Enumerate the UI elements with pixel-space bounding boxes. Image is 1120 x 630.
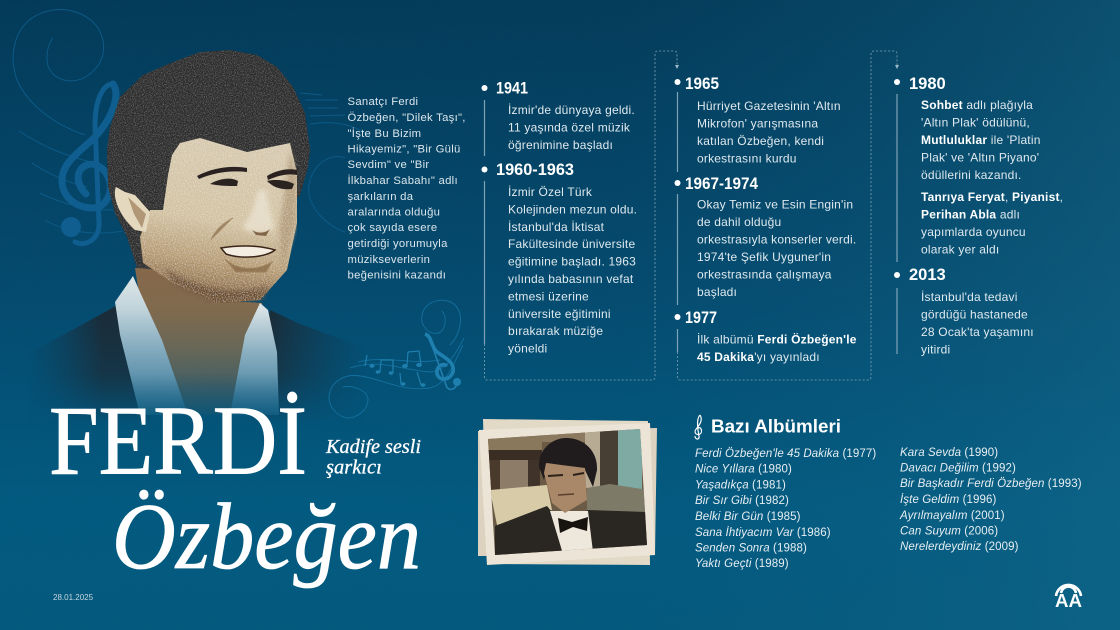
biography text: Özbeğen, "Dilek Taşı", — [348, 112, 466, 124]
entry: 1977: İlk albümü Ferdi Özbeğen'le — [697, 332, 857, 346]
date: 28.01.2025 — [53, 593, 94, 602]
entry: 1941: İzmir'de dünyaya geldi. — [508, 103, 635, 117]
entry: 1965: 1965 — [685, 75, 719, 93]
entry: 1967-1974 — [674, 175, 856, 305]
entry: 1965: katılan Özbeğen, kendi — [697, 134, 824, 148]
albums heading with clef icon: Bazı Albümleri — [711, 416, 841, 436]
smile lines and chin shadow — [211, 218, 272, 272]
entry: 1980: 'Altın Plak' ödülünü, — [921, 116, 1030, 130]
entry: 1980: Mutluluklar ile 'Platin — [921, 133, 1041, 147]
entry: 1967-1974: başladı — [697, 285, 737, 299]
nose highlight — [243, 190, 274, 233]
biography text: müzikseverlerin — [348, 254, 430, 266]
eyebrows — [197, 167, 297, 180]
timeline column 1 — [482, 80, 637, 356]
entry: 1977 — [674, 309, 857, 364]
entry: 1960-1963: bırakarak müziğe — [508, 324, 603, 338]
album list, column 1: Belki Bir Gün (1985) — [695, 511, 801, 523]
entry: 1980: Sohbet adlı plağıyla — [921, 98, 1033, 112]
title: Özbeğen: Özbeğen — [112, 485, 421, 589]
album list, column 1: Ferdi Özbeğen'le 45 Dakika (1977) — [695, 448, 876, 460]
entry: 1960-1963: yılında babasının vefat — [508, 272, 634, 286]
timeline column 3 — [894, 75, 1063, 356]
ear — [115, 187, 150, 232]
biography text — [348, 96, 466, 282]
photo content — [488, 429, 647, 555]
shirt collar — [115, 276, 188, 415]
biography text: şarkıların da — [348, 191, 414, 203]
entry: 1960-1963: Fakültesinde üniversite — [508, 237, 635, 251]
entry: 1960-1963: etmesi üzerine — [508, 289, 589, 303]
entry: 1941 — [482, 80, 635, 156]
album list, column 1: Yaşadıkça (1981) — [695, 480, 786, 492]
neck and chest — [135, 268, 268, 415]
face — [140, 138, 297, 303]
album list, column 1: Senden Sonra (1988) — [695, 542, 807, 554]
entry: 2013: İstanbul'da tedavi — [921, 290, 1018, 304]
title: FERDİ: FERDİ — [49, 386, 307, 496]
album list, column 2: Nerelerdeydiniz (2009) — [900, 541, 1019, 553]
jacket — [44, 306, 345, 417]
entry: 1960-1963: 1960-1963 — [496, 161, 574, 179]
timeline connectors (dashed) with arrows — [484, 51, 899, 380]
icon: small treble clef — [695, 415, 701, 439]
entry: 1967-1974: orkestrasıyla konserler verdi. — [697, 232, 856, 246]
album list, column 2: Ayrılmayalım (2001) — [899, 510, 1005, 522]
album list, column 2: Kara Sevda (1990) — [900, 447, 998, 459]
biography text: Sevdim" ve "Bir — [348, 159, 429, 171]
entry: 1977: 1977 — [685, 309, 717, 327]
album list, column 1: Bir Sır Gibi (1982) — [695, 495, 789, 507]
entry: 1967-1974: 1967-1974 — [685, 175, 759, 193]
paper stack — [483, 419, 650, 565]
entry: 1980: Plak' ve 'Altın Piyano' — [921, 150, 1039, 164]
album list, column 2: İşte Geldim (1996) — [900, 494, 996, 506]
entry: 1965: Hürriyet Gazetesinin 'Altın — [697, 99, 841, 113]
biography text: Hikayemiz", "Bir Gülü — [348, 144, 461, 156]
biography text: İlkbahar Sabahı" adlı — [348, 174, 458, 187]
album list, column 1: Yaktı Geçti (1989) — [695, 558, 789, 570]
logo: Anadolu Agency: AA — [1055, 591, 1082, 611]
entry: 1967-1974: orkestrasında çalışmaya — [697, 268, 832, 282]
entry: 1960-1963: İstanbul'da İktisat — [508, 220, 605, 234]
album list, column 2: Davacı Değilim (1992) — [900, 462, 1016, 474]
entry: 1965 — [674, 75, 841, 172]
timeline column 2 — [674, 75, 857, 364]
decorative music swirls and staff lines, top left — [13, 10, 372, 233]
entry: 2013: gördüğü hastanede — [921, 308, 1028, 322]
entry: 1965: Mikrofon' yarışmasına — [697, 116, 818, 130]
entry: 1960-1963: üniversite eğitimini — [508, 307, 611, 321]
eyes — [210, 179, 294, 189]
entry: 2013: 2013 — [909, 266, 946, 284]
biography text: Sanatçı Ferdi — [348, 96, 418, 108]
entry: 1960-1963: eğitimine başladı. 1963 — [508, 255, 636, 269]
entry: 1967-1974: 1974'te Şefik Uyguner'in — [697, 250, 831, 264]
mouth — [221, 246, 275, 257]
entry: 1980: Tanrıya Feryat, Piyanist, — [921, 190, 1063, 204]
entry: 1967-1974: Okay Temiz ve Esin Engin'in — [697, 198, 853, 212]
album list, column 1 — [695, 448, 876, 570]
biography text: "İşte Bu Bizim — [348, 127, 421, 140]
album list, column 1: Sana İhtiyacım Var (1986) — [695, 527, 831, 539]
icon: large treble clef — [61, 84, 116, 244]
subtitle: Kadife sesli şarkıcı: şarkıcı — [326, 456, 382, 478]
entry: 2013 — [894, 266, 1034, 356]
entry: 1980: ödüllerini kazandı. — [921, 168, 1022, 182]
entry: 2013: 28 Ocak'ta yaşamını — [921, 325, 1034, 339]
framed photo of the artist — [478, 419, 657, 565]
biography text: getirdiği yorumuyla — [348, 238, 448, 250]
entry: 1941: 1941 — [496, 80, 528, 98]
entry: 1960-1963: yöneldi — [508, 342, 547, 356]
album list, column 1: Nice Yıllara (1980) — [695, 464, 792, 476]
entry: 1960-1963: İzmir Özel Türk — [508, 185, 593, 199]
entry: 1965: orkestrasını kurdu — [697, 152, 797, 166]
biography text: beğenisini kazandı — [348, 270, 446, 282]
entry: 1980: yapımlarda oyuncu — [921, 225, 1026, 239]
entry: 1980: Perihan Abla adlı — [921, 208, 1020, 222]
entry: 1977: 45 Dakika'yı yayınladı — [697, 350, 820, 364]
biography text: aralarında olduğu — [348, 206, 440, 218]
album list, column 2 — [899, 447, 1082, 553]
hair — [107, 50, 310, 270]
entry: 1980: 1980 — [909, 75, 946, 93]
entry: 1941: öğrenimine başladı — [508, 138, 613, 152]
entry: 1960-1963 — [482, 161, 637, 356]
entry: 1960-1963: Kolejinden mezun oldu. — [508, 202, 637, 216]
subtitle: Kadife sesli şarkıcı — [325, 436, 421, 478]
biography text: çok sayıda esere — [348, 222, 437, 234]
entry: 1980 — [894, 75, 1063, 262]
album list, column 2: Bir Başkadır Ferdi Özbeğen (1993) — [900, 478, 1082, 490]
entry: 1980: olarak yer aldı — [921, 242, 999, 256]
portrait photo: Ferdi Özbeğen — [44, 50, 345, 417]
entry: 1941: 11 yaşında özel müzik — [508, 120, 631, 134]
entry: 1967-1974: de dahil olduğu — [697, 215, 781, 229]
album list, column 2: Can Suyum (2006) — [900, 526, 998, 538]
decorative notes and small clef, lower right of portrait — [329, 300, 464, 418]
subtitle: Kadife sesli şarkıcı: Kadife sesli — [325, 436, 421, 458]
entry: 2013: yitirdi — [921, 342, 950, 356]
